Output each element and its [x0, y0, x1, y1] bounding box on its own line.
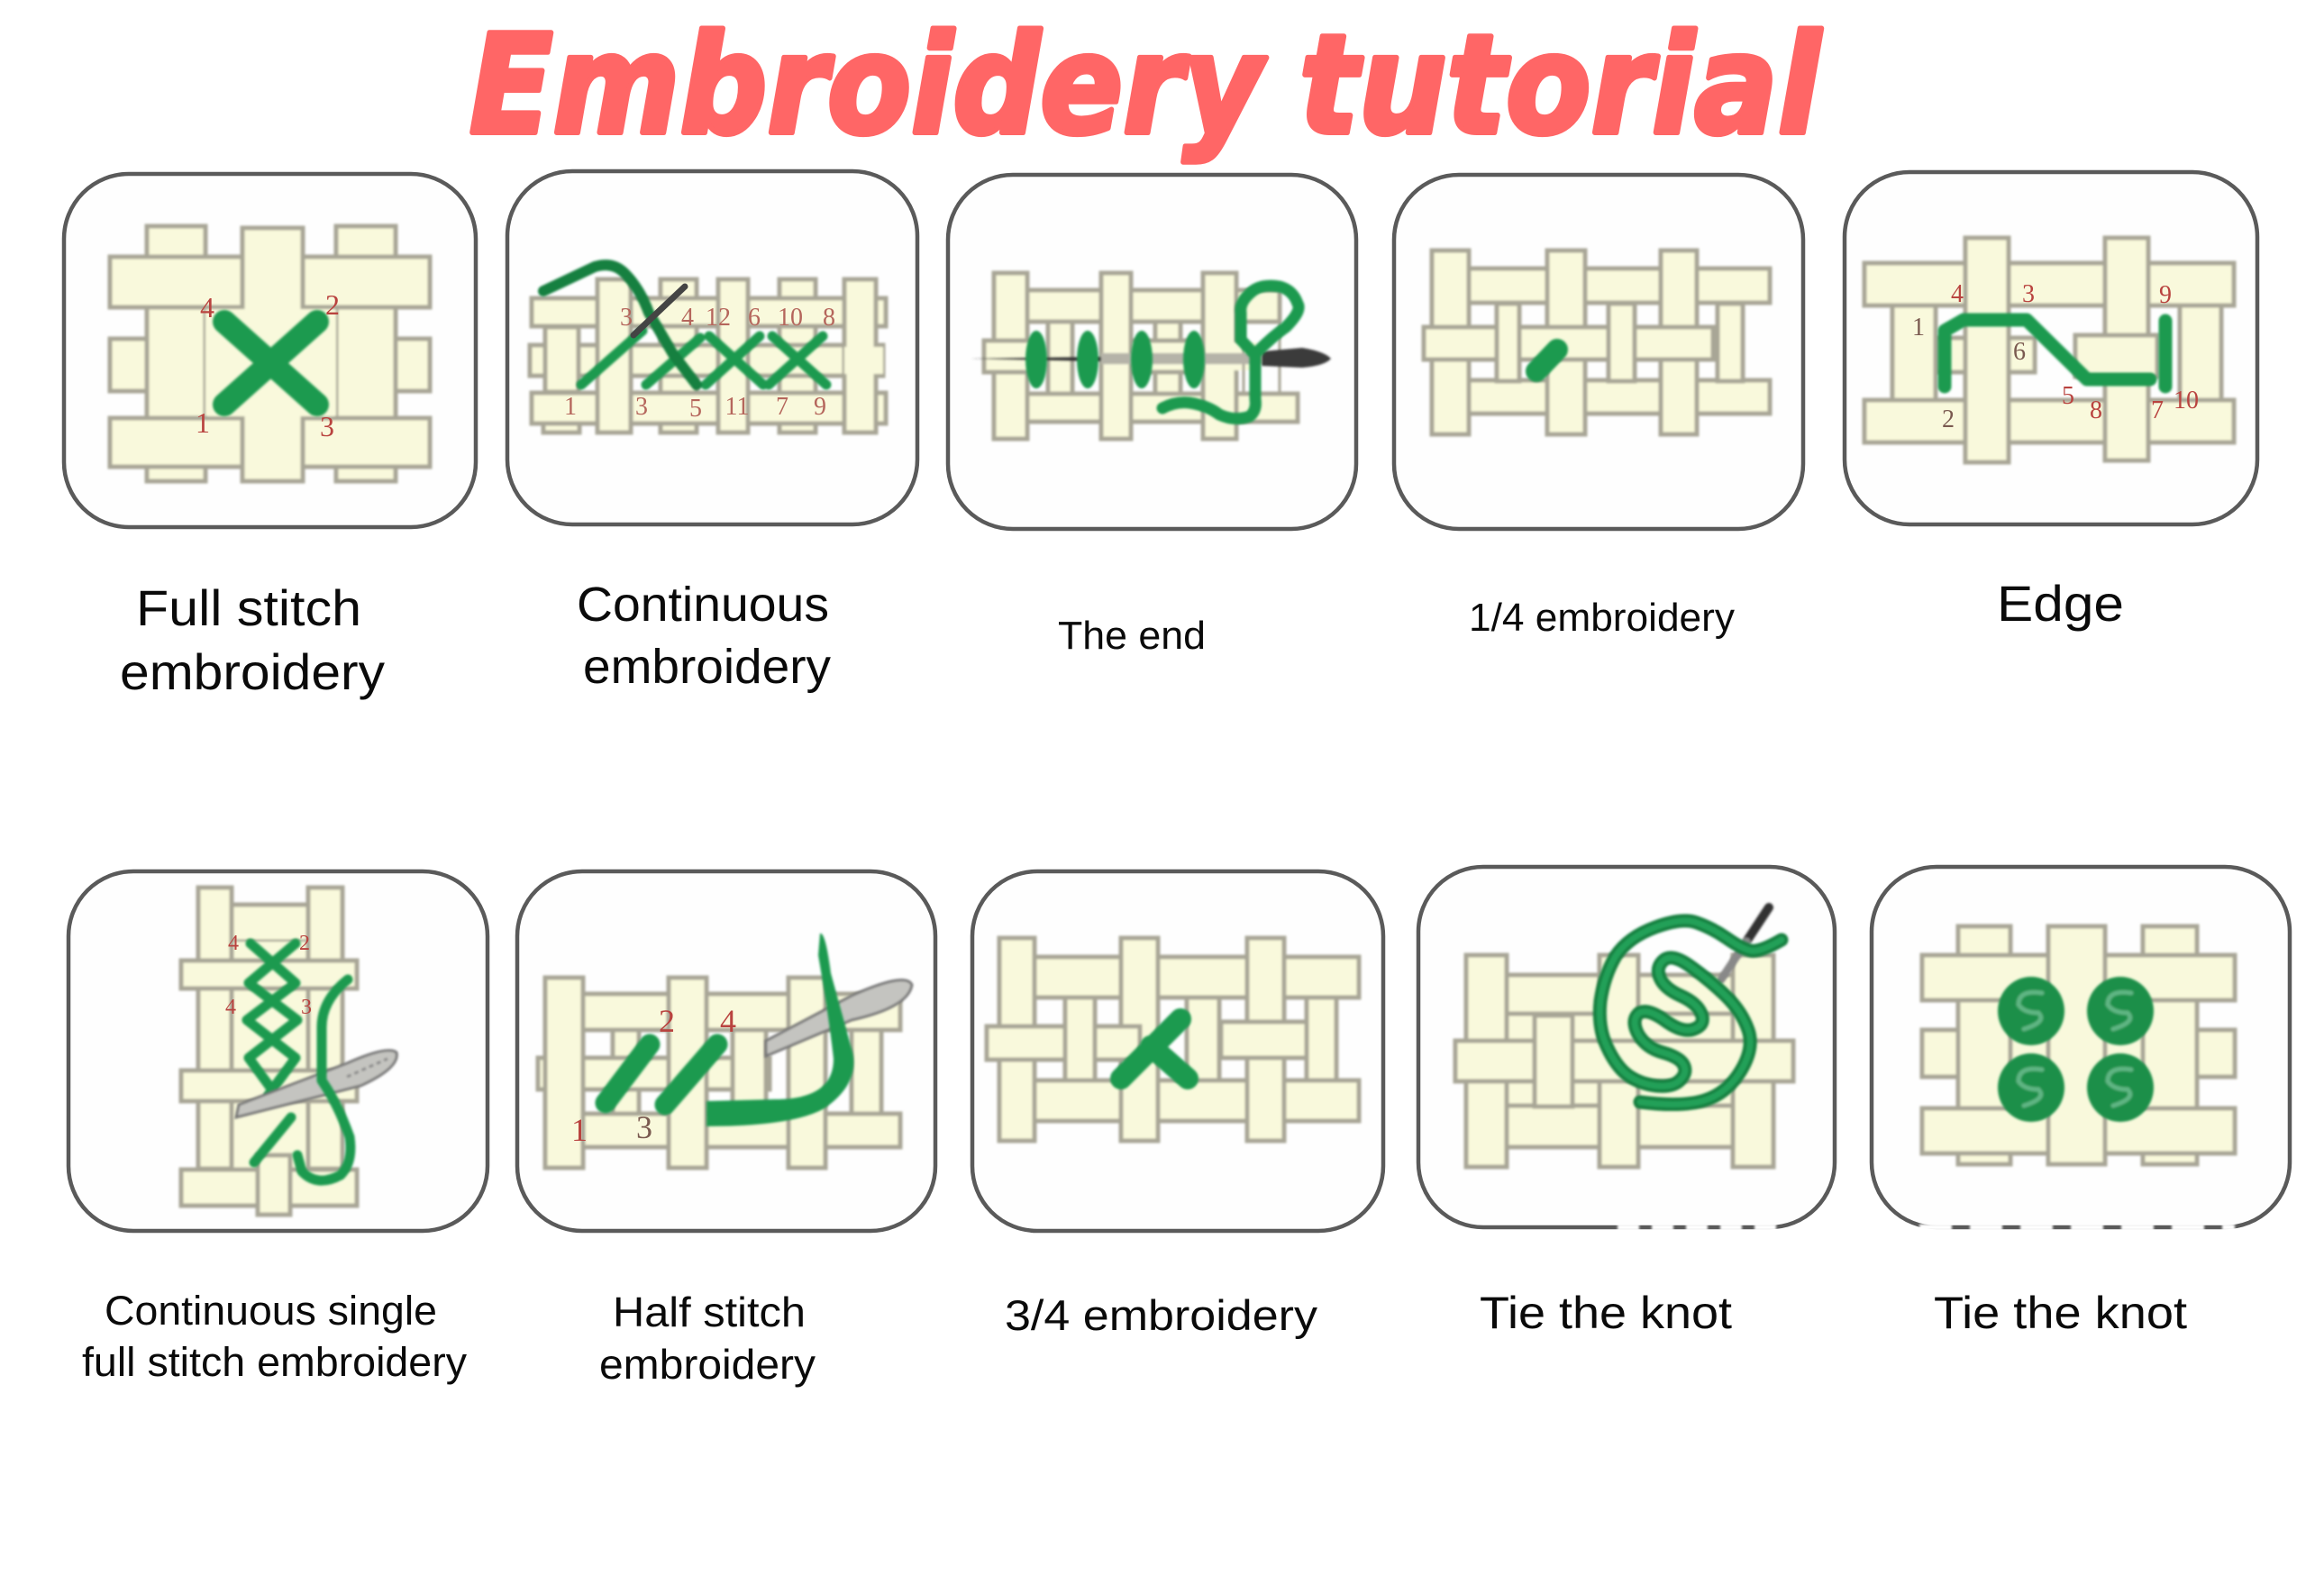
fabric weave: [1455, 955, 1793, 1167]
stitch numbers: 10: [778, 304, 803, 332]
needle: [1721, 907, 1769, 979]
title: [469, 5, 1822, 165]
stitch numbers: [564, 304, 835, 423]
label: full stitch embroidery: [120, 579, 385, 700]
title: Embroidery: [469, 5, 1267, 165]
panel: tie the knot, thread: [1418, 867, 1835, 1227]
label: half stitch embroidery: [599, 1289, 816, 1388]
stitch numbers: 6: [2013, 338, 2026, 366]
label: the end: The end: [1058, 614, 1206, 658]
stitch numbers: 1: [1912, 314, 1925, 342]
stitch numbers: 3: [620, 304, 633, 332]
stitch numbers: 3: [635, 393, 648, 421]
label: full stitch embroidery: Full stitch: [136, 579, 361, 636]
stitch numbers: [225, 932, 312, 1019]
panel: the end: [948, 175, 1356, 529]
stitches: lattice: [247, 943, 297, 1162]
title: tutorial: [1299, 5, 1822, 165]
needle: [766, 980, 912, 1056]
stitch: three quarter: [1121, 1019, 1188, 1079]
fabric weave: [987, 938, 1359, 1141]
stitch numbers: 2: [325, 288, 340, 321]
stitch numbers: 3: [2022, 280, 2035, 308]
panel: half stitch embroidery: [517, 871, 935, 1231]
stitch numbers: 4: [1951, 280, 1964, 308]
stitch numbers: [571, 1003, 736, 1148]
label: 3/4 embroidery: 3/4 embroidery: [1005, 1291, 1318, 1339]
stitch numbers: 6: [748, 304, 761, 332]
fabric weave: [1922, 926, 2235, 1164]
stitch numbers: 5: [2062, 382, 2074, 410]
stitch numbers: 3: [320, 410, 334, 442]
stitches: edge line: [1945, 320, 2165, 387]
stitch numbers: 9: [2159, 281, 2172, 309]
needle: [236, 1051, 396, 1117]
stitch numbers: 3: [301, 996, 312, 1019]
panel: tie the knot, finished knots: [1872, 867, 2290, 1227]
stitch numbers: 1: [564, 393, 577, 421]
stitch numbers: 7: [2151, 396, 2164, 424]
needle: [971, 348, 1331, 368]
stitch numbers: 4: [228, 932, 239, 955]
panel: edge: [1845, 172, 2257, 524]
stitch numbers: 5: [689, 395, 702, 423]
fabric weave: [110, 226, 430, 481]
stitch numbers: 4: [225, 996, 236, 1019]
stitch numbers: 1: [196, 406, 210, 439]
panel: full stitch embroidery: [64, 174, 476, 527]
stitch numbers: 2: [659, 1003, 675, 1039]
stitch numbers: [196, 288, 340, 442]
stitch numbers: 3: [636, 1109, 652, 1145]
fabric weave: [538, 978, 900, 1168]
label: half stitch embroidery: embroidery: [599, 1341, 816, 1388]
stitch numbers: 12: [706, 304, 731, 332]
label: continuous single full stitch embroidery: Continuous single: [105, 1288, 437, 1334]
fabric weave: [984, 273, 1298, 439]
fabric weave: [1864, 238, 2234, 462]
stitch: cross: [224, 322, 317, 405]
stitch numbers: 11: [725, 393, 749, 421]
French knots: [1998, 977, 2154, 1122]
panel: 1/4 embroidery: [1394, 175, 1803, 529]
label: continuous single full stitch embroidery: [82, 1288, 468, 1385]
stitch numbers: 2: [299, 932, 310, 955]
panel: continuous embroidery: [507, 171, 917, 524]
stitch numbers: 2: [1942, 405, 1955, 433]
panel: continuous single full stitch embroidery: [68, 871, 488, 1231]
stitches and thread: [1025, 286, 1299, 419]
label: continuous single full stitch embroidery: full stitch embroidery: [82, 1339, 468, 1385]
needle: [633, 287, 685, 335]
label: edge: Edge: [1997, 575, 2124, 632]
label: tie the knot: Tie the knot: [1934, 1288, 2187, 1338]
stitch numbers: 4: [200, 291, 214, 323]
stitch numbers: 8: [2090, 396, 2102, 424]
label: continuous embroidery: Continuous: [577, 578, 829, 632]
label: 1/4 embroidery: 1/4 embroidery: [1469, 596, 1735, 640]
stitch numbers: 8: [823, 304, 835, 332]
fabric weave: [181, 888, 357, 1215]
thread knot: [1599, 921, 1782, 1105]
label: continuous embroidery: [577, 578, 831, 694]
stitch numbers: 9: [814, 393, 826, 421]
stitch numbers: 4: [681, 304, 694, 332]
stitch numbers: 10: [2174, 387, 2199, 414]
stitches and thread: [606, 934, 853, 1126]
thread: [297, 979, 351, 1180]
fabric weave: [530, 279, 886, 433]
label: half stitch embroidery: Half stitch: [613, 1289, 806, 1335]
label: continuous embroidery: embroidery: [583, 640, 831, 694]
label: tie the knot: Tie the knot: [1480, 1288, 1732, 1338]
stitch: quarter: [1536, 350, 1557, 371]
panel: 3/4 embroidery: [972, 871, 1383, 1231]
fabric weave: [1424, 251, 1770, 434]
stitch numbers: 7: [776, 393, 788, 421]
stitches: crosses and thread: [543, 265, 826, 385]
stitch numbers: 4: [720, 1003, 736, 1039]
stitch numbers: 1: [571, 1112, 588, 1148]
stitch numbers: [1912, 280, 2199, 433]
label: full stitch embroidery: embroidery: [120, 643, 385, 700]
